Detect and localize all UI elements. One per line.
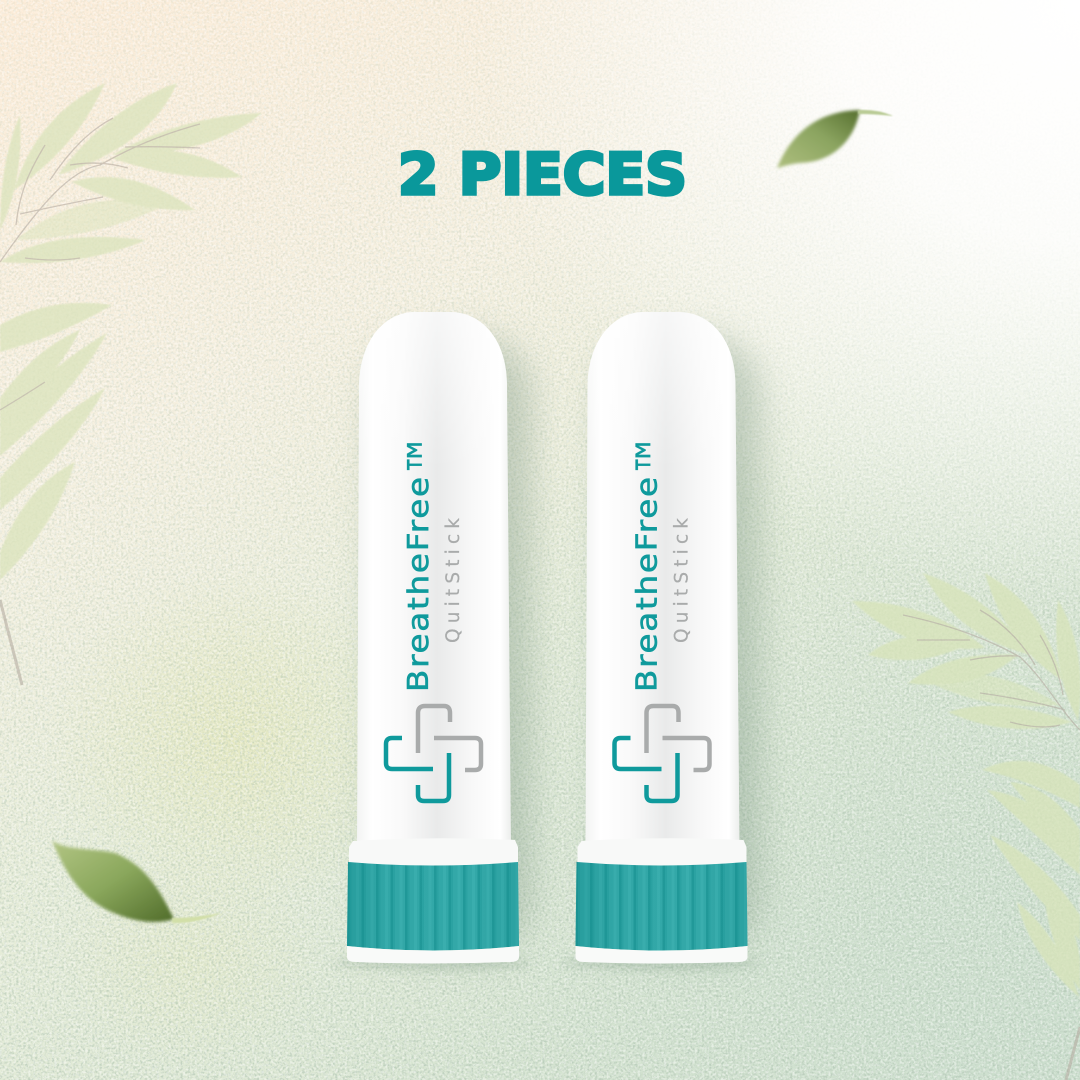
shadow <box>562 335 762 968</box>
foliage: right branch <box>852 573 1080 1080</box>
brand name: ™ <box>398 434 458 476</box>
cap base <box>347 946 519 964</box>
brand name: BreatheFree <box>403 475 435 692</box>
brand name: ™ <box>626 434 687 476</box>
brand name: BreatheFree <box>631 475 664 692</box>
product name: QuitStick <box>672 518 692 643</box>
cap base <box>576 946 748 964</box>
product: inhaler stick 1 <box>333 312 533 968</box>
product name: QuitStick <box>443 518 464 643</box>
collar <box>349 838 518 866</box>
icon: floating leaf bottom left <box>52 840 221 923</box>
brand name <box>398 434 458 692</box>
icon: floating leaf top right <box>777 110 893 168</box>
logo cross <box>614 706 710 801</box>
foliage: left branch <box>0 83 262 685</box>
logo cross <box>386 706 481 801</box>
cap <box>576 862 748 950</box>
tube body <box>586 312 740 845</box>
product: inhaler stick 2 <box>562 312 762 968</box>
shadow <box>333 335 533 968</box>
brand name <box>626 434 687 692</box>
cap <box>347 862 519 950</box>
collar <box>578 838 746 866</box>
title: 2 PIECES <box>398 142 687 208</box>
tube body <box>357 312 511 845</box>
